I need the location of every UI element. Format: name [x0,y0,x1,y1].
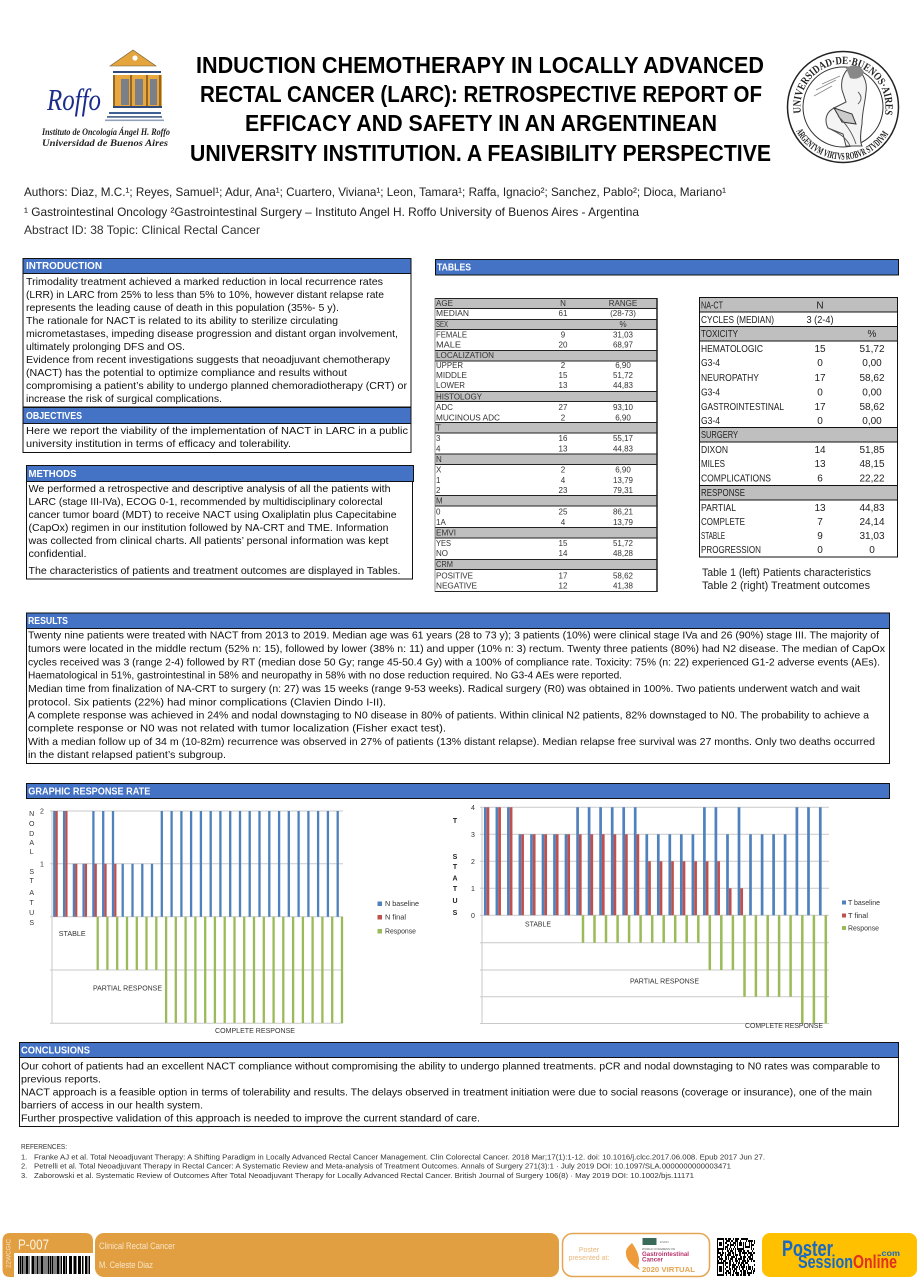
table 1: patients characteristics: 2 [561,414,566,422]
table 2: treatment outcomes: G3-4 [701,358,720,369]
y axis title: S [29,920,34,927]
title: RECTAL CANCER (LARC): RETROSPECTIVE REPORT OF [200,81,762,107]
conclusions text [21,1060,880,1124]
table 1: patients characteristics: FEMALE [436,330,467,340]
table 2: treatment outcomes: 13 [814,459,826,470]
y axis title: T [30,878,35,885]
table 1: patients characteristics: 13,79 [613,518,634,527]
y axis title: S [29,869,34,876]
table 1: patients characteristics: 86,21 [613,508,634,516]
chart: T status response: 4 [471,805,475,812]
legend: N final [385,915,406,922]
table 1: patients characteristics: 44,83 [613,444,634,454]
y axis title: T [453,864,458,871]
panel: results [26,613,890,764]
table 1: patients characteristics: ADC [436,403,453,412]
table 1: patients characteristics: X [436,466,442,474]
footer: topic and author bar: M. Celeste Diaz [99,1260,153,1270]
y axis title: A [29,840,34,847]
table 1: patients characteristics: 25 [559,508,568,516]
legend: T baseline [848,900,880,907]
table 1: patients characteristics: 4 [436,444,441,454]
authors block: Abstract ID: 38 Topic: Clinical Rectal Cancer [24,223,260,237]
footer: QR code [717,1239,755,1275]
chart: nodal status response: COMPLETE RESPONSE [215,1026,295,1035]
title: UNIVERSITY INSTITUTION. A FEASIBILITY PERSPECTIVE [190,140,771,166]
panel: conclusions [20,1042,898,1126]
conclusions text: NACT approach is a feasible option in terms of tolerability and results. The delays observed in treatment initiation were due to social reasons (coverage or insurance), one of the main [21,1086,872,1098]
y axis title: S [453,854,458,861]
barcode [18,1256,90,1274]
table 2: treatment outcomes: N [816,300,824,312]
chart: nodal status response: STABLE [59,929,86,938]
table 1: patients characteristics: 4 [561,518,566,527]
table 1: patients characteristics: 2 [561,361,566,370]
table 1: patients characteristics: SEX [436,320,448,329]
table 1: patients characteristics: POSITIVE [436,572,473,580]
legend: N baseline [385,901,419,908]
table 1: patients characteristics: 15 [559,539,568,548]
results text: tumors were located in the middle rectum (52% n: 15), followed by lower (38% n: 11) and upper (10% n: 3) rectum. Twenty three patients (80%) had N2 disease. The median of CapOx [28,643,886,655]
results text: protocol. Six patients (22%) had minor complications (Clavien Dindo I-II). [28,696,386,708]
heading: introduction [23,258,411,274]
table 1: patients characteristics: LOCALIZATION [436,351,494,360]
y axis title: U [452,898,458,905]
table captions: Table 1 (left) Patients characteristics [702,567,871,579]
footer: PosterSessionOnline logo: .com [879,1249,900,1258]
panel: objectives [23,408,411,452]
heading: introduction: INTRODUCTION [26,261,102,272]
table 1: patients characteristics: 23 [559,486,568,495]
objectives text [26,425,408,450]
table 1: patients characteristics: 61 [559,309,568,318]
series: response [583,915,826,1023]
references: 1. [21,1152,27,1162]
table 2: treatment outcomes: % [868,329,877,340]
table 2: treatment outcomes: 9 [817,531,823,542]
table 1: patients characteristics: MEDIAN [436,309,469,318]
table 1: patients characteristics: 0 [436,508,441,516]
introduction text: micrometastases, impeding disease progression and distant organ involvement, [26,328,398,340]
icon: wheat [626,1243,640,1270]
results text: A complete response was achieved in 24% and nodal downstaging to N0 disease in 80% of patients. Within clinical N2 patients, 82% downstaged to N0. The probability to achieve a [28,710,869,722]
footer: congress badge: Poster [579,1247,600,1254]
footer: congress badge: WORLD CONGRESS ON [642,1247,675,1251]
chart: nodal status response: 1 [40,862,44,868]
table 1: patients characteristics: 15 [559,371,568,380]
series: T final [488,807,742,915]
seal: Universidad de Buenos Aires: UNIVERSIDAD·DE·BUENOS·AIRES [793,56,893,115]
table 1: patients characteristics: 93,10 [613,403,634,412]
table 2: treatment outcomes: 13 [814,503,826,514]
y axis title: S [453,910,458,917]
methods text: was collected from clinical charts. All patients’ personal information was kept [27,535,389,547]
introduction text: Trimodality treatment achieved a marked reduction in local recurrence rates [26,276,383,288]
footer: congress badge [562,1234,710,1276]
objectives text: Here we report the viability of the implementation of NACT in LARC in a public [26,425,408,437]
table 1: patients characteristics: 14 [559,549,568,558]
footer: PosterSessionOnline logo: Session [798,1252,853,1272]
table 1: patients characteristics: T [436,424,441,432]
table 2: treatment outcomes: 51,72 [859,344,885,355]
y axis title: O [29,821,35,828]
chart: T status response: PARTIAL RESPONSE [630,976,699,986]
table 1: patients characteristics: 51,72 [613,371,634,380]
objectives text: university institution in terms of efficacy and tolerability. [26,438,291,450]
table 2: treatment outcomes: 48,15 [859,459,885,470]
methods text: confidential. [28,548,86,560]
table 1: patients characteristics: (28-73) [610,309,636,318]
y axis title: T [453,886,458,893]
results text: in the distant relapsed patient’s subgroup. [28,749,226,761]
y axis title [452,818,458,917]
table 2: treatment outcomes: 58,62 [859,373,885,384]
methods text: LARC (stage III-IVa), ECOG 0-1, recommended by multidisciplinary colorectal [28,496,382,508]
table 1: patients characteristics: MALE [436,340,461,350]
table 1: patients characteristics: NEGATIVE [436,582,477,590]
table 1: patients characteristics: 4 [561,476,566,485]
heading: objectives: OBJECTIVES [26,411,82,422]
table 2: treatment outcomes: GASTROINTESTINAL [701,402,784,413]
conclusions text: Our cohort of patients had an excellent NACT compliance without compromising the ability to undergo planned treatments. pCR and nodal downstaging to N0 rates was comparable to [21,1060,880,1072]
table 1: patients characteristics: 2 [436,486,441,495]
results text: Twenty nine patients were treated with NACT from 2013 to 2019. Median age was 61 years (28 to 73 y); 3 patients (10%) were clinical stage IVa and 26 (90%) stage III. The majority of [28,630,879,642]
table 1: patients characteristics: N [436,455,442,464]
table 1: patients characteristics: NO [436,549,448,558]
table 2: treatment outcomes: STABLE [701,531,725,542]
heading: tables: TABLES [437,262,471,274]
table 2: treatment outcomes: NA-CT [701,300,723,312]
table 2: treatment outcomes: COMPLICATIONS [701,474,771,484]
results text: complete response or N0 was not related with tumor localization (Fisher exact test). [28,722,446,734]
series: T baseline [485,807,820,915]
table 1: patients characteristics: 9 [561,330,566,340]
table 1: patients characteristics: 6,90 [615,466,631,474]
logo: Instituto Roffo: Universidad de Buenos Aires [42,139,168,149]
methods text: The characteristics of patients and treatment outcomes are displayed in Tables. [28,565,400,577]
table 1: patients characteristics [435,298,657,592]
heading: methods: METHODS [28,469,77,480]
results text: Haematological in 51%, gastrointestinal in 58% and neuropathy in 58% with no dose reduction required. No G3-4 AEs were reported. [28,670,622,682]
table 1: patients characteristics: 68,97 [613,340,634,350]
y axis title: D [29,831,34,838]
table 2: treatment outcomes: PROGRESSION [701,545,761,556]
table 1: patients characteristics: % [619,320,627,329]
results text: With a median follow up of 34 m (10-82m) recurrence was observed in 27% of patients (13% distant relapse). Median relapse free survival was 27 months. Only two deaths occurred [28,736,875,748]
chart: nodal status response: 2 [40,808,44,816]
table 2: treatment outcomes: 0 [817,416,823,427]
chart: T status response: 0 [471,913,475,920]
table 2: treatment outcomes: G3-4 [701,388,720,398]
introduction text: The rationale for NACT is related to its ability to sterilize circulating [26,315,338,327]
heading: conclusions: CONCLUSIONS [21,1046,90,1056]
y axis title: U [29,910,34,917]
table 1: patients characteristics: 16 [559,434,568,443]
chart: nodal status response [29,808,419,1035]
footer: congress badge: Gastrointestinal [642,1252,689,1258]
references: REFERENCES: [21,1142,67,1151]
authors block: Authors: Diaz, M.C.¹; Reyes, Samuel¹; Adur, Ana¹; Cuartero, Viviana¹; Leon, Tamara¹; Raffa, Ignacio²; Sanchez, Pablo²; Dioca, Mariano¹ [24,185,726,199]
table 2: treatment outcomes: 58,62 [859,402,885,413]
table 2: treatment outcomes: TOXICITY [701,329,738,340]
table captions: Table 2 (right) Treatment outcomes [702,580,870,592]
legend: T final [848,913,868,920]
table 2: treatment outcomes: 22,22 [859,474,885,484]
references [21,1142,765,1180]
y axis title: A [452,876,458,882]
table 1: patients characteristics: 17 [559,572,568,580]
introduction text: Evidence from recent investigations suggests that neoadjuvant chemotherapy [26,354,391,366]
table 2: treatment outcomes: DIXON [701,445,728,456]
table 1: patients characteristics: 1 [436,476,441,485]
table 2: treatment outcomes: 44,83 [859,503,885,514]
footer: topic and author bar: Clinical Rectal Cancer [99,1241,175,1251]
introduction text: represents the leading cause of death in this population (35%- 5 y). [26,302,339,314]
chart: T status response: COMPLETE RESPONSE [745,1021,823,1030]
introduction text: ultimately prolonging DFS and OS. [26,341,185,353]
table 1: patients characteristics: 79,31 [613,486,634,495]
table 1: patients characteristics: M [436,496,443,506]
table 2: treatment outcomes: 6 [817,474,823,484]
table 1: patients characteristics: 41,38 [613,582,634,590]
table 2: treatment outcomes: 0 [817,358,823,369]
heading: conclusions [20,1042,898,1058]
title: INDUCTION CHEMOTHERAPY IN LOCALLY ADVANCED [196,52,764,78]
references: Franke AJ et al. Total Neoadjuvant Therapy: A Shifting Paradigm in Locally Advanced Rectal Cancer Management. Clin Colorectal Cancer. 2018 Mar;17(1):1-12. doi: 10.1016/j.clcc.2017.06.008. Epub 2017 Jun 27. [34,1152,765,1162]
footer: PosterSessionOnline logo [762,1233,917,1277]
results text: Median time from finalization of NA-CRT to surgery (n: 27) was 15 weeks (range 9-53 weeks). Radical surgery (R0) was obtained in 100%. Two patients underwent watch and wait [28,683,860,695]
logo: Instituto Roffo: Roffo [46,82,101,117]
table 2: treatment outcomes: SURGERY [701,430,738,441]
table 1: patients characteristics: 3 [436,434,441,443]
table 1: patients characteristics: YES [436,539,451,548]
references: Petrelli et al. Total Neoadjuvant Therapy in Rectal Cancer: A Systematic Review and Meta-analysis of Treatment Outcomes. Annals of Surgery 271(3):1 · July 2019 DOI: 10.1097/SLA.0000000000003471 [34,1162,731,1170]
heading: results: RESULTS [28,616,68,627]
series: N final [57,811,115,917]
table 2: treatment outcomes: 17 [814,373,826,384]
logo: Instituto Roffo [41,50,170,149]
authors block: ¹ Gastrointestinal Oncology ²Gastrointestinal Surgery – Instituto Angel H. Roffo University of Buenos Aires - Argentina [24,205,639,219]
table 1: patients characteristics: 13 [559,444,568,454]
authors block [24,185,726,237]
heading: objectives [23,408,411,424]
table 1: patients characteristics: 27 [559,403,568,412]
y axis title: N [29,811,34,818]
table 1: patients characteristics: 6,90 [615,414,631,422]
table 2: treatment outcomes: RESPONSE [701,488,745,499]
table 2: treatment outcomes: CYCLES (MEDIAN) [701,315,774,326]
footer: topic and author bar [95,1233,559,1277]
conclusions text: barriers of access in our health system. [21,1100,203,1112]
introduction text: compromising a patient’s ability to undergo planned chemoradiotherapy (CRT) or [26,380,408,392]
table 1: patients characteristics: MUCINOUS ADC [436,414,500,422]
table 1: patients characteristics: 48,28 [613,549,634,558]
heading: tables [436,260,898,275]
table 1: patients characteristics: 58,62 [613,572,634,580]
legend [378,901,419,936]
table captions [702,567,871,592]
table 1: patients characteristics: 1A [436,518,446,527]
footer: poster id and barcode: 22WCGIC [6,1238,12,1268]
methods text: We performed a retrospective and descriptive analysis of all the patients with [28,483,391,495]
table 2: treatment outcomes: 51,85 [859,445,885,456]
chart: T status response: 1 [471,886,475,893]
footer: PosterSessionOnline logo: Poster [782,1236,833,1261]
panel: introduction [23,258,411,407]
table 1: patients characteristics: 6,90 [615,361,631,370]
introduction text: (NACT) has the potential to optimize compliance and results without [26,367,347,379]
references: 3. [21,1171,27,1180]
table 2: treatment outcomes: 24,14 [859,517,885,528]
table 1: patients characteristics: 2 [561,466,566,474]
table 2: treatment outcomes: 3 (2-4) [806,315,834,326]
table 1: patients characteristics: 31,03 [613,330,634,340]
table 1: patients characteristics: LOWER [436,381,465,390]
table 2: treatment outcomes [699,297,898,558]
y axis title [29,811,35,927]
title [190,52,771,166]
legend [842,900,880,932]
legend: Response [848,926,879,932]
table 1: patients characteristics: AGE [436,299,453,308]
table 1: patients characteristics: 55,17 [613,434,634,443]
chart: T status response: STABLE [525,920,551,929]
logo: Instituto Roffo: Instituto de Oncología Ángel H. Roffo [41,126,170,138]
table 2: treatment outcomes: 0,00 [862,388,882,398]
table 2: treatment outcomes: 31,03 [859,531,885,542]
chart: nodal status response: PARTIAL RESPONSE [93,984,162,992]
table 1: patients characteristics: N [560,299,566,308]
series: N baseline [54,811,338,917]
table 2: treatment outcomes: 17 [814,402,826,413]
footer: congress badge: presented at: [569,1255,609,1262]
table 1: patients characteristics: CRM [436,560,453,569]
table 1: patients characteristics: MIDDLE [436,371,467,380]
table 2: treatment outcomes: MILES [701,459,725,470]
footer: poster id and barcode [2,1233,93,1277]
conclusions text: previous reports. [21,1074,101,1086]
table 2: treatment outcomes: 0 [869,545,875,556]
table 1: patients characteristics: EMVI [436,528,456,538]
footer: congress badge: ESMO [660,1240,670,1244]
heading: graphic response rate [26,784,890,798]
table 2: treatment outcomes: HEMATOLOGIC [701,344,763,355]
table 2: treatment outcomes: 0,00 [862,416,882,427]
results text [28,630,886,761]
y axis title: L [30,849,34,856]
table 2: treatment outcomes: 7 [817,517,823,528]
seal: Universidad de Buenos Aires [786,50,900,164]
series: response [98,917,342,1023]
introduction text: (LRR) in LARC from 25% to less than 5% to 10%, however distant relapse rate [26,289,384,301]
table 2: treatment outcomes: 15 [814,344,826,355]
table 2: treatment outcomes: NEUROPATHY [701,373,759,384]
heading: graphic response rate: GRAPHIC RESPONSE RATE [28,786,151,798]
table 2: treatment outcomes: 0 [817,545,823,556]
footer: poster id and barcode: P-007 [18,1238,49,1254]
conclusions text: Further prospective validation of this approach is needed to improve the current standard of care. [21,1112,480,1124]
table 1: patients characteristics: 51,72 [613,539,634,548]
methods text: cancer tumor board (MDT) to receive NACT using Oxaliplatin plus Capecitabine [28,509,397,521]
table 1: patients characteristics: 13 [559,381,568,390]
heading: results [26,613,890,628]
y axis title: A [29,890,34,897]
panel: methods [26,466,414,579]
table 1: patients characteristics: 20 [559,340,568,350]
y axis title: T [30,900,35,907]
table 2: treatment outcomes: COMPLETE [701,517,745,528]
footer: PosterSessionOnline logo: Online [853,1252,897,1272]
table 1: patients characteristics: UPPER [436,361,463,370]
y axis title: T [453,818,458,825]
table 1: patients characteristics: 12 [559,582,568,590]
legend: Response [385,929,416,936]
table 2: treatment outcomes: 0 [817,388,823,398]
table 2: treatment outcomes: PARTIAL [701,503,736,514]
footer: congress badge: Cancer [642,1258,664,1264]
title: EFFICACY AND SAFETY IN AN ARGENTINEAN [245,110,717,136]
references: 2. [21,1162,27,1170]
table 1: patients characteristics: 13,79 [613,476,634,485]
table 1: patients characteristics: RANGE [609,299,637,308]
chart: T status response: 2 [471,859,475,866]
table 2: treatment outcomes: G3-4 [701,416,720,427]
footer: congress badge: 2020 VIRTUAL [642,1267,696,1274]
table 1: patients characteristics: HISTOLOGY [436,392,483,402]
methods text [27,483,401,577]
table 2: treatment outcomes: 0,00 [862,358,882,369]
table 1: patients characteristics: 44,83 [613,381,634,390]
methods text: (CapOx) regimen in our institution followed by NA-CRT and TME. Information [28,522,389,534]
introduction text: increase the risk of surgical complications. [26,393,222,405]
seal: Universidad de Buenos Aires: ARGENTVM VIRTVS ROBVR STVDIVM [796,129,888,160]
chart: T status response: 3 [471,832,475,839]
introduction text [26,276,408,405]
results text: cycles received was 3 (range 2-4) followed by RT (median dose 50 Gy; range 45-50.4 Gy) with a 100% of compliance rate. Toxicity: 75% (n: 22) experienced G1-2 adverse events (AEs). [28,656,880,668]
references: Zaborowski et al. Systematic Review of Outcomes After Total Neoadjuvant Therapy for Locally Advanced Rectal Cancer. British Journal of Surgery 106(8) · May 2019 DOI: 10.1002/bjs.11171 [34,1171,694,1180]
heading: methods [26,466,414,482]
table 2: treatment outcomes: 14 [814,445,826,456]
chart: T status response [452,805,880,1030]
